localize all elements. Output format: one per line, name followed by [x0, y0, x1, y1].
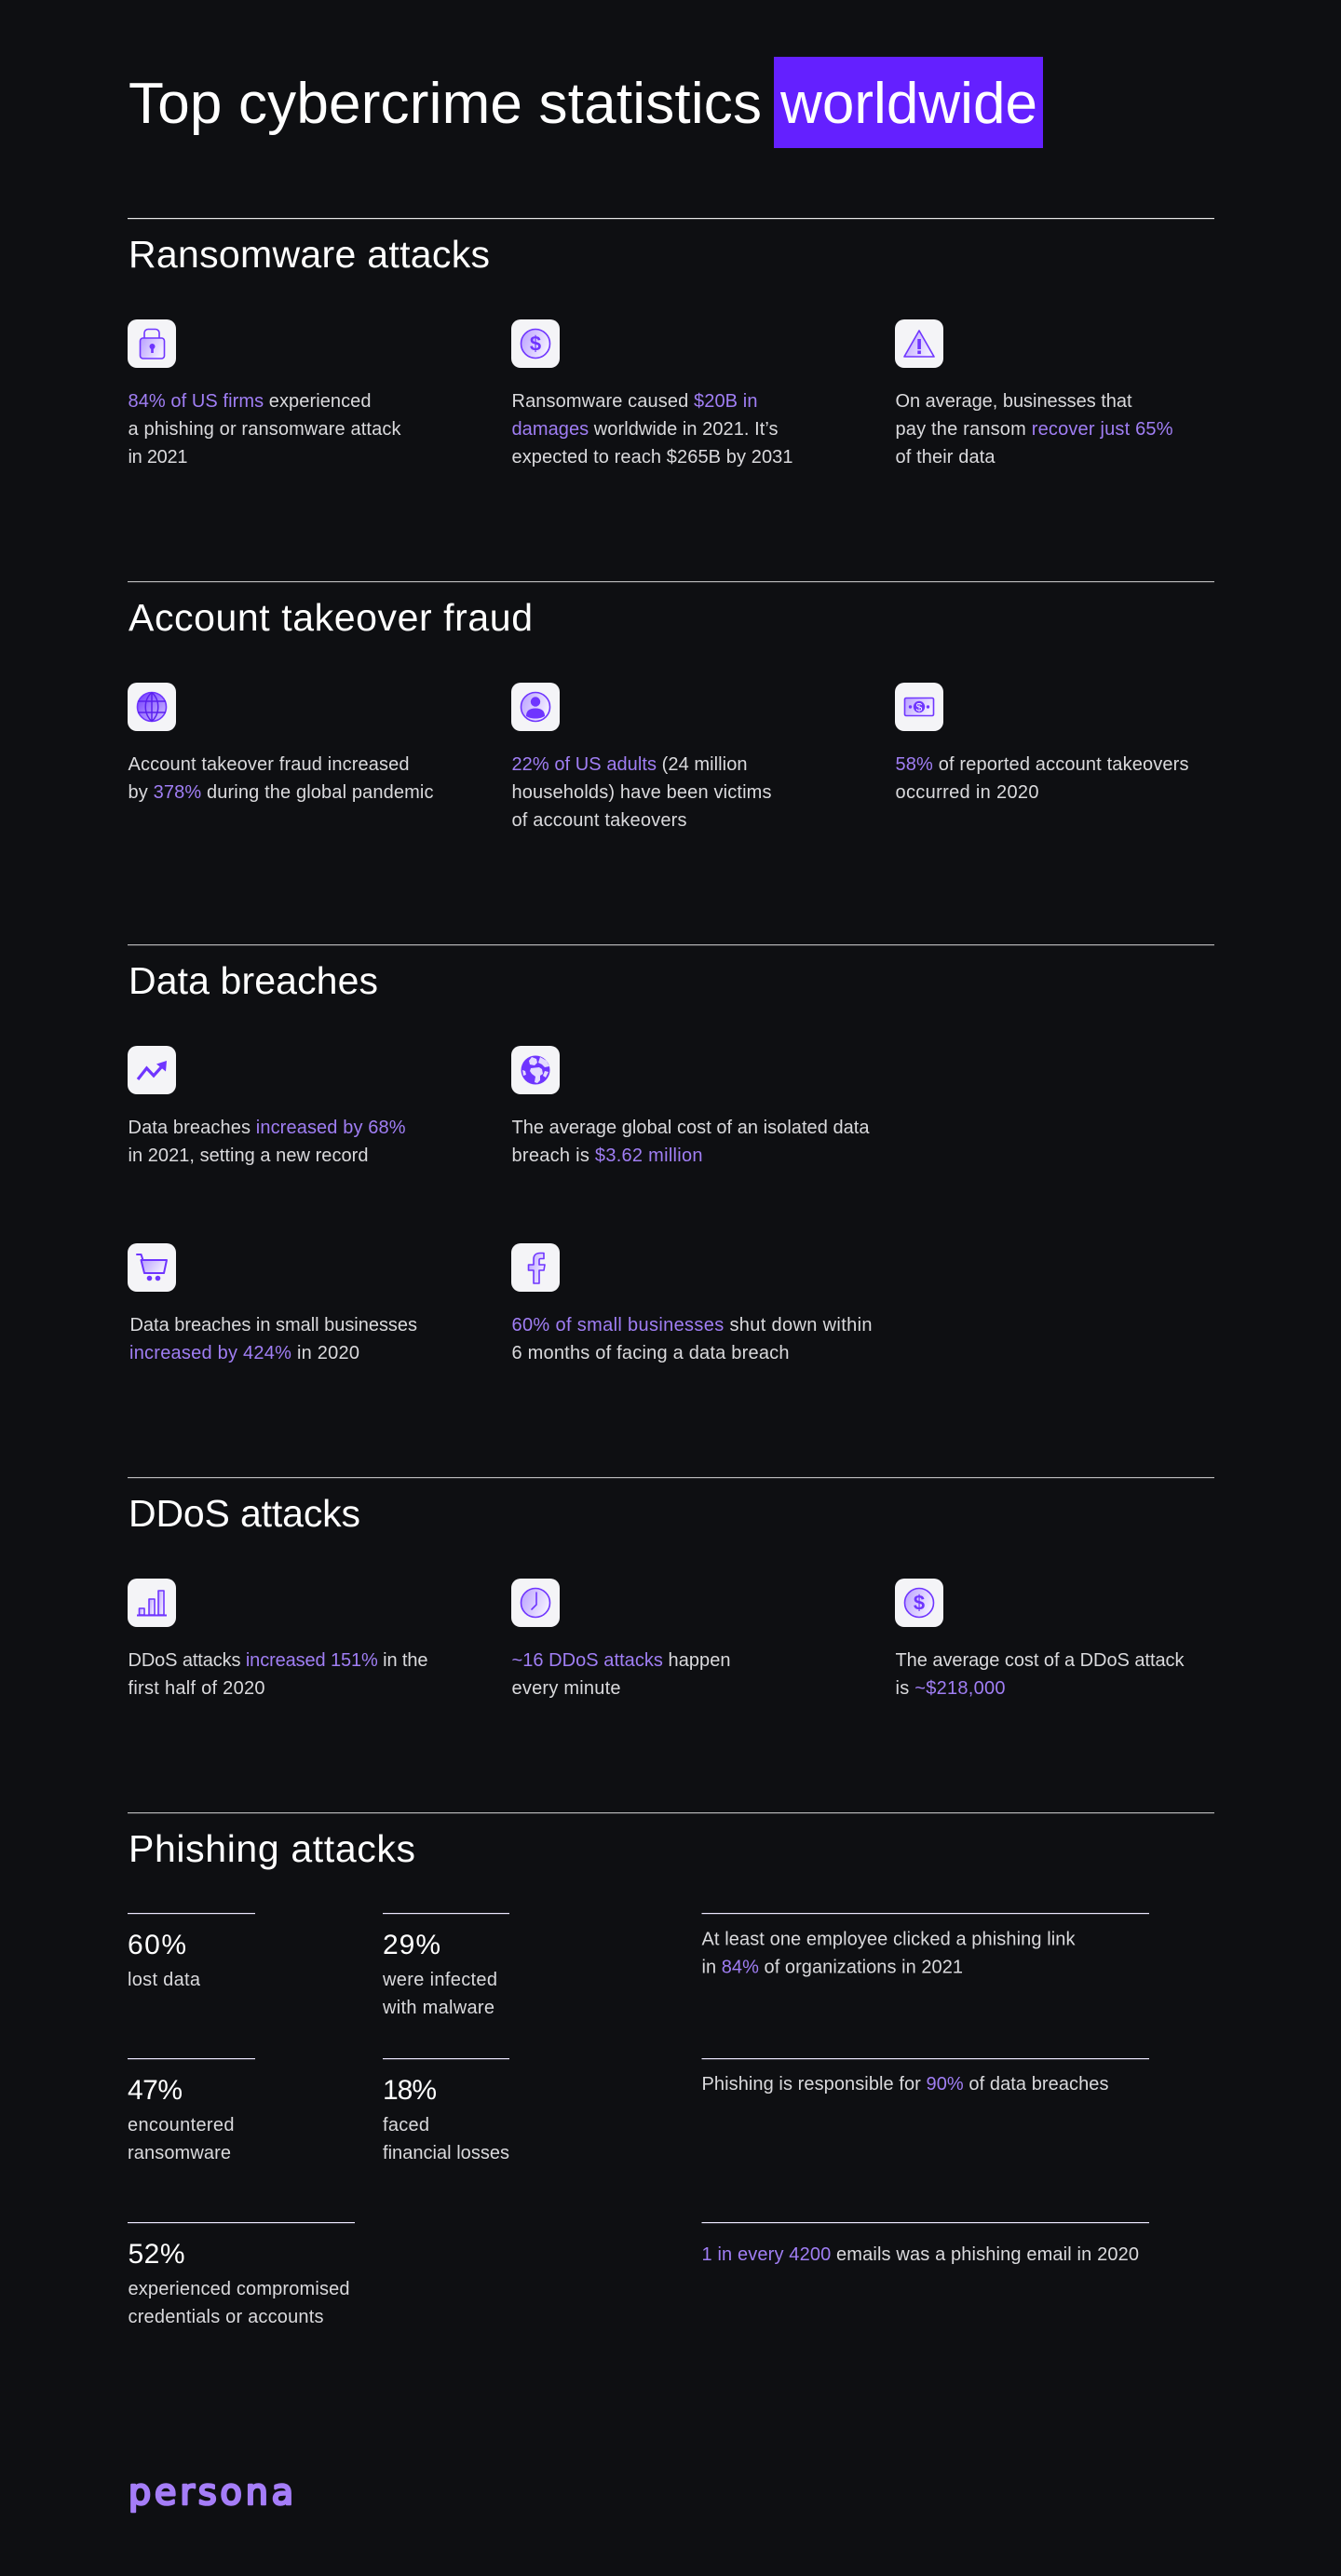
stat: 60% lost data: [128, 1913, 255, 1990]
text: damages: damages worldwide in 2021. It’s: [512, 419, 779, 440]
text: ransom recovery: of their data: [896, 447, 996, 468]
text: attacks per minute: [512, 1650, 730, 1699]
text: ransom recovery: [896, 391, 1173, 468]
icon: padlock: [128, 319, 176, 368]
text: small business shutdowns: 60% of small businesses shut down within: [512, 1315, 872, 1335]
heading: ransomware attacks: Ransomware attacks: [129, 233, 490, 276]
icon: dollar coin: [895, 1579, 943, 1627]
stat: 47% ransomware: encountered: [128, 2115, 235, 2135]
card: attacks per minute: [511, 1579, 730, 1699]
icon: dollar coin: [511, 319, 560, 368]
text: US adults: 22% of US adults (24 million: [512, 754, 747, 775]
heading: data breaches: Data breaches: [129, 959, 378, 1002]
text: US adults: households) have been victims: [512, 782, 771, 803]
stat: 60% lost data: 60%: [128, 1930, 186, 1960]
stat: 29% malware: were infected: [382, 1970, 497, 1990]
icon: dollar coin: $: [530, 332, 541, 356]
logo: persona: persona: [129, 2472, 293, 2513]
text: damages: expected to reach $265B by 2031: [512, 447, 793, 468]
stat: 52% compromised credentials: experienced compromised: [129, 2279, 350, 2299]
stat: responsible for data breaches: Phishing is responsible for 90% of data breaches: [702, 2074, 1108, 2095]
text: DDoS increase: first half of 2020: [129, 1678, 264, 1699]
heading: account takeover fraud: Account takeover fraud: [129, 596, 533, 639]
stat: 47% ransomware: 47%: [128, 2075, 183, 2106]
card: 2020 takeovers: [895, 683, 1188, 803]
text: small business shutdowns: 6 months of facing a data breach: [512, 1343, 790, 1363]
highlighted word: worldwide: [774, 57, 1043, 148]
card: small business shutdowns: [511, 1243, 872, 1363]
stat: clicked a phishing link: [702, 1913, 1149, 1978]
highlighted word: worldwide: worldwide: [779, 72, 1037, 136]
text: small business breaches: increased by 424% in 2020: [129, 1343, 359, 1363]
icon: world map globe: [511, 1046, 560, 1094]
text: US adults: [512, 754, 771, 831]
title text: Top cybercrime statistics: [129, 72, 762, 136]
stat: 29% malware: with malware: [382, 1998, 494, 2018]
panel: account takeover fraud: [128, 581, 1214, 831]
icon: person: [511, 683, 560, 731]
card: small business breaches: [128, 1243, 417, 1363]
title: [129, 57, 1043, 148]
text: breaches increased: in 2021, setting a new record: [129, 1146, 369, 1166]
text: small business breaches: Data breaches in small businesses: [130, 1315, 417, 1335]
panel: ransomware attacks: [128, 218, 1214, 468]
card: ransom recovery: [895, 319, 1173, 468]
icon: bar chart: [128, 1579, 176, 1627]
text: DDoS increase: DDoS attacks increased 151% in the: [129, 1650, 428, 1671]
text: small business shutdowns: [512, 1315, 872, 1363]
icon: banknote: $: [916, 700, 923, 713]
text: 2020 takeovers: occurred in 2020: [896, 782, 1039, 803]
stat: 47% ransomware: ransomware: [128, 2143, 231, 2163]
text: ransom recovery: On average, businesses that: [896, 391, 1132, 412]
text: ransom recovery: pay the ransom recover just 65%: [896, 419, 1173, 440]
text: DDoS cost: The average cost of a DDoS attack: [896, 1650, 1185, 1671]
text: US firms: a phishing or ransomware attack: [129, 419, 402, 440]
stat: 52% compromised credentials: [128, 2222, 355, 2327]
text: 2020 takeovers: 58% of reported account takeovers: [896, 754, 1188, 775]
text: breaches increased: Data breaches increased by 68%: [129, 1118, 406, 1138]
text: US adults: of account takeovers: [512, 810, 687, 831]
stat: 60% lost data: lost data: [128, 1970, 201, 1990]
stat: 29% malware: 29%: [383, 1930, 440, 1960]
stat: 47% ransomware: [128, 2058, 255, 2163]
icon: facebook logo: [511, 1243, 560, 1292]
card: pandemic increase: [128, 683, 434, 803]
heading: DDoS attacks: DDoS attacks: [129, 1492, 360, 1535]
text: DDoS increase: [129, 1650, 428, 1699]
text: US firms: 84% of US firms experienced: [129, 391, 371, 412]
text: average cost: [512, 1118, 870, 1166]
stat: 18% financial losses: financial losses: [383, 2143, 509, 2163]
text: attacks per minute: every minute: [512, 1678, 620, 1699]
panel: phishing attacks: [128, 1812, 1214, 2327]
text: pandemic increase: [129, 754, 434, 803]
card: US adults: [511, 683, 771, 831]
panel: data breaches: [128, 944, 1214, 1363]
text: damages: [512, 391, 793, 468]
card: breaches increased: [128, 1046, 406, 1166]
icon: dollar coin: $: [914, 1591, 925, 1615]
icon: rising zigzag arrow: [128, 1046, 176, 1094]
panel: DDoS attacks: [128, 1477, 1214, 1699]
stat: phishing email frequency: 1 in every 4200 emails was a phishing email in 2020: [702, 2244, 1139, 2265]
text: breaches increased: [129, 1118, 406, 1166]
text: 2020 takeovers: [896, 754, 1188, 803]
card: DDoS increase: [128, 1579, 428, 1699]
text: US firms: [129, 391, 402, 468]
card: average cost: [511, 1046, 870, 1166]
text: average cost: The average global cost of an isolated data: [512, 1118, 870, 1138]
text: small business breaches: [129, 1315, 417, 1363]
card: US firms: [128, 319, 402, 468]
stat: clicked a phishing link: in 84% of organizations in 2021: [702, 1958, 963, 1978]
card: DDoS cost: [895, 1579, 1185, 1699]
text: pandemic increase: by 378% during the global pandemic: [129, 782, 434, 803]
stat: 52% compromised credentials: 52%: [129, 2239, 184, 2270]
icon: banknote: [895, 683, 943, 731]
stat: clicked a phishing link: At least one employee clicked a phishing link: [702, 1930, 1077, 1950]
text: DDoS cost: [896, 1650, 1185, 1699]
stat: 52% compromised credentials: credentials or accounts: [129, 2307, 324, 2327]
stat: 18% financial losses: 18%: [383, 2075, 437, 2106]
text: DDoS cost: is ~$218,000: [896, 1678, 1006, 1699]
text: pandemic increase: Account takeover fraud increased: [129, 754, 410, 775]
stat: 18% financial losses: [383, 2058, 509, 2163]
icon: clock: [511, 1579, 560, 1627]
heading: phishing attacks: Phishing attacks: [129, 1827, 415, 1870]
stat: 18% financial losses: faced: [383, 2115, 429, 2135]
icon: warning triangle: [895, 319, 943, 368]
card: damages: [511, 319, 793, 468]
text: damages: Ransomware caused $20B in: [512, 391, 758, 412]
icon: globe: [128, 683, 176, 731]
icon: shopping cart: [128, 1243, 176, 1292]
text: US firms: in 2021: [129, 447, 188, 468]
stat: 29% malware: [382, 1913, 509, 2018]
text: attacks per minute: ~16 DDoS attacks happen: [512, 1650, 730, 1671]
text: average cost: breach is $3.62 million: [512, 1146, 702, 1166]
